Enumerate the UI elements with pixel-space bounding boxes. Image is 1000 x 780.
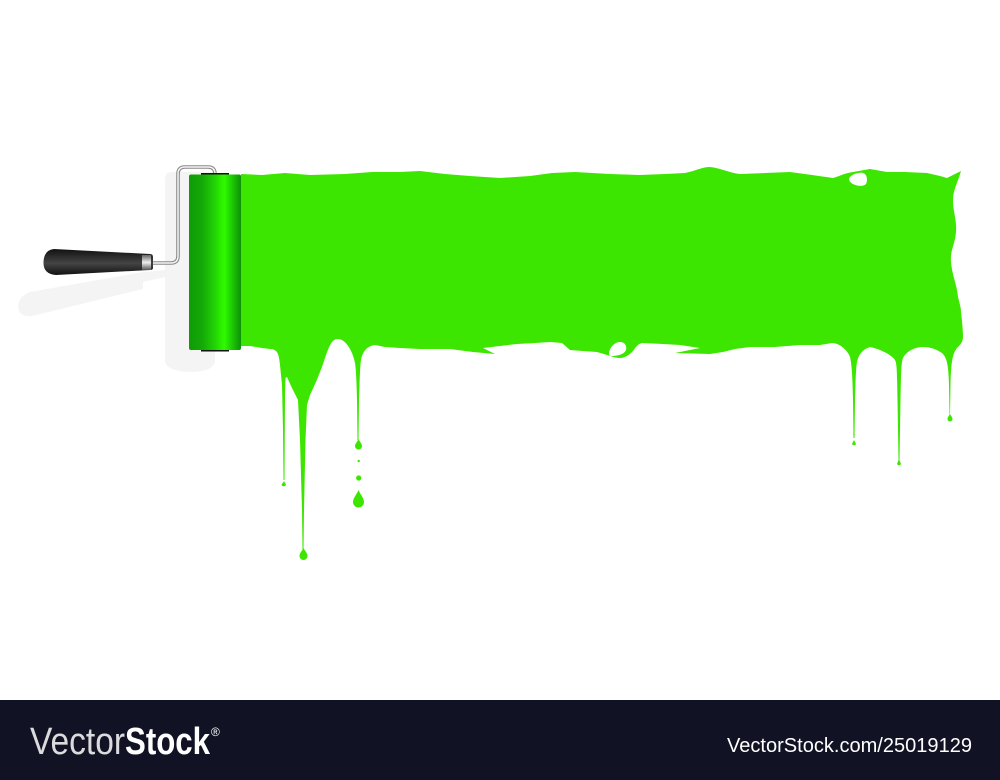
green paint stroke with drips: [241, 167, 963, 550]
wire frame: [153, 167, 215, 263]
footer bar: [0, 700, 1000, 780]
paint drops: [282, 414, 952, 560]
image id: VectorStock.com/25019129: [727, 735, 972, 757]
handle grip: [43, 249, 153, 275]
logo: VectorStock: [30, 721, 211, 763]
handle ferrule: [142, 255, 151, 270]
roller shadow: [18, 172, 215, 372]
registered mark: ®: [211, 725, 220, 739]
roller sleeve: [189, 174, 241, 350]
roller end caps: [201, 173, 229, 352]
paint roller: [43, 167, 241, 352]
